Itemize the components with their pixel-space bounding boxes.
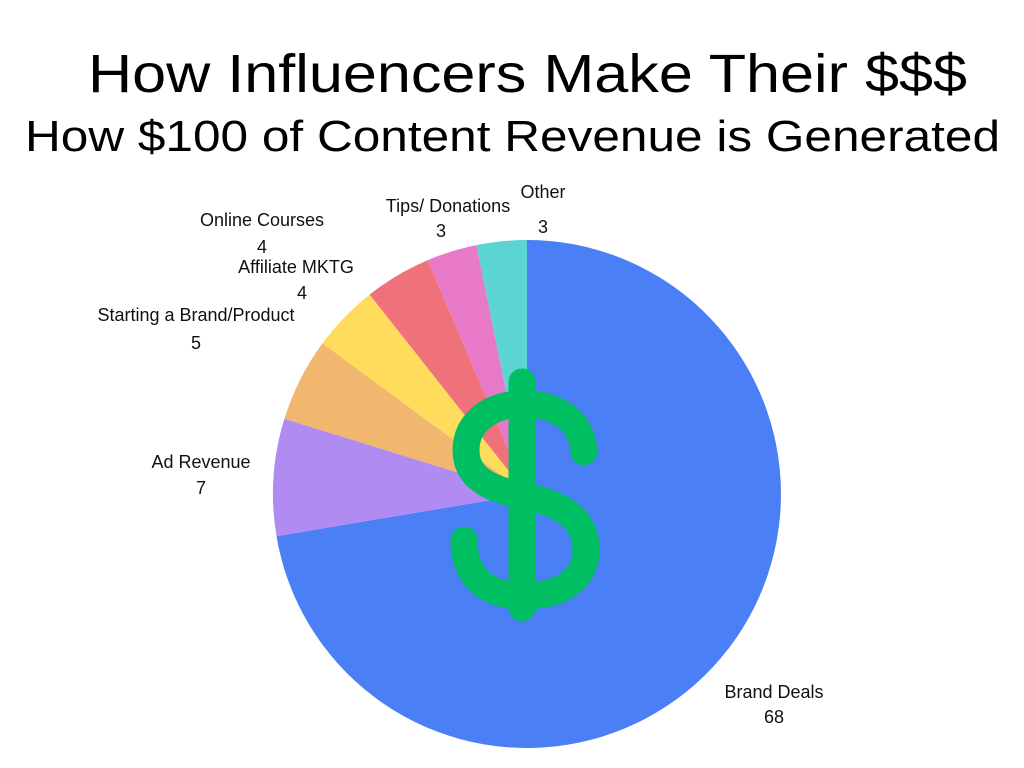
labels: 4 — [297, 283, 307, 303]
labels: 5 — [191, 333, 201, 353]
labels: Affiliate MKTG — [238, 257, 354, 277]
labels: Other — [520, 182, 566, 202]
labels: Online Courses — [200, 210, 324, 230]
labels: Tips/ Donations — [386, 196, 510, 216]
subtitle: How $100 of Content Revenue is Generated — [25, 112, 1000, 161]
labels: Starting a Brand/Product — [97, 305, 295, 325]
labels: 7 — [196, 478, 206, 498]
labels: 3 — [436, 221, 446, 241]
labels: Ad Revenue — [151, 452, 251, 472]
labels — [97, 182, 824, 727]
title: How Influencers Make Their $$$ — [88, 44, 967, 104]
labels: Brand Deals — [724, 682, 824, 702]
icon: dollar sign — [464, 382, 586, 608]
labels: 3 — [538, 217, 548, 237]
labels: 68 — [764, 707, 784, 727]
labels: 4 — [257, 237, 267, 257]
pie chart — [273, 240, 781, 748]
